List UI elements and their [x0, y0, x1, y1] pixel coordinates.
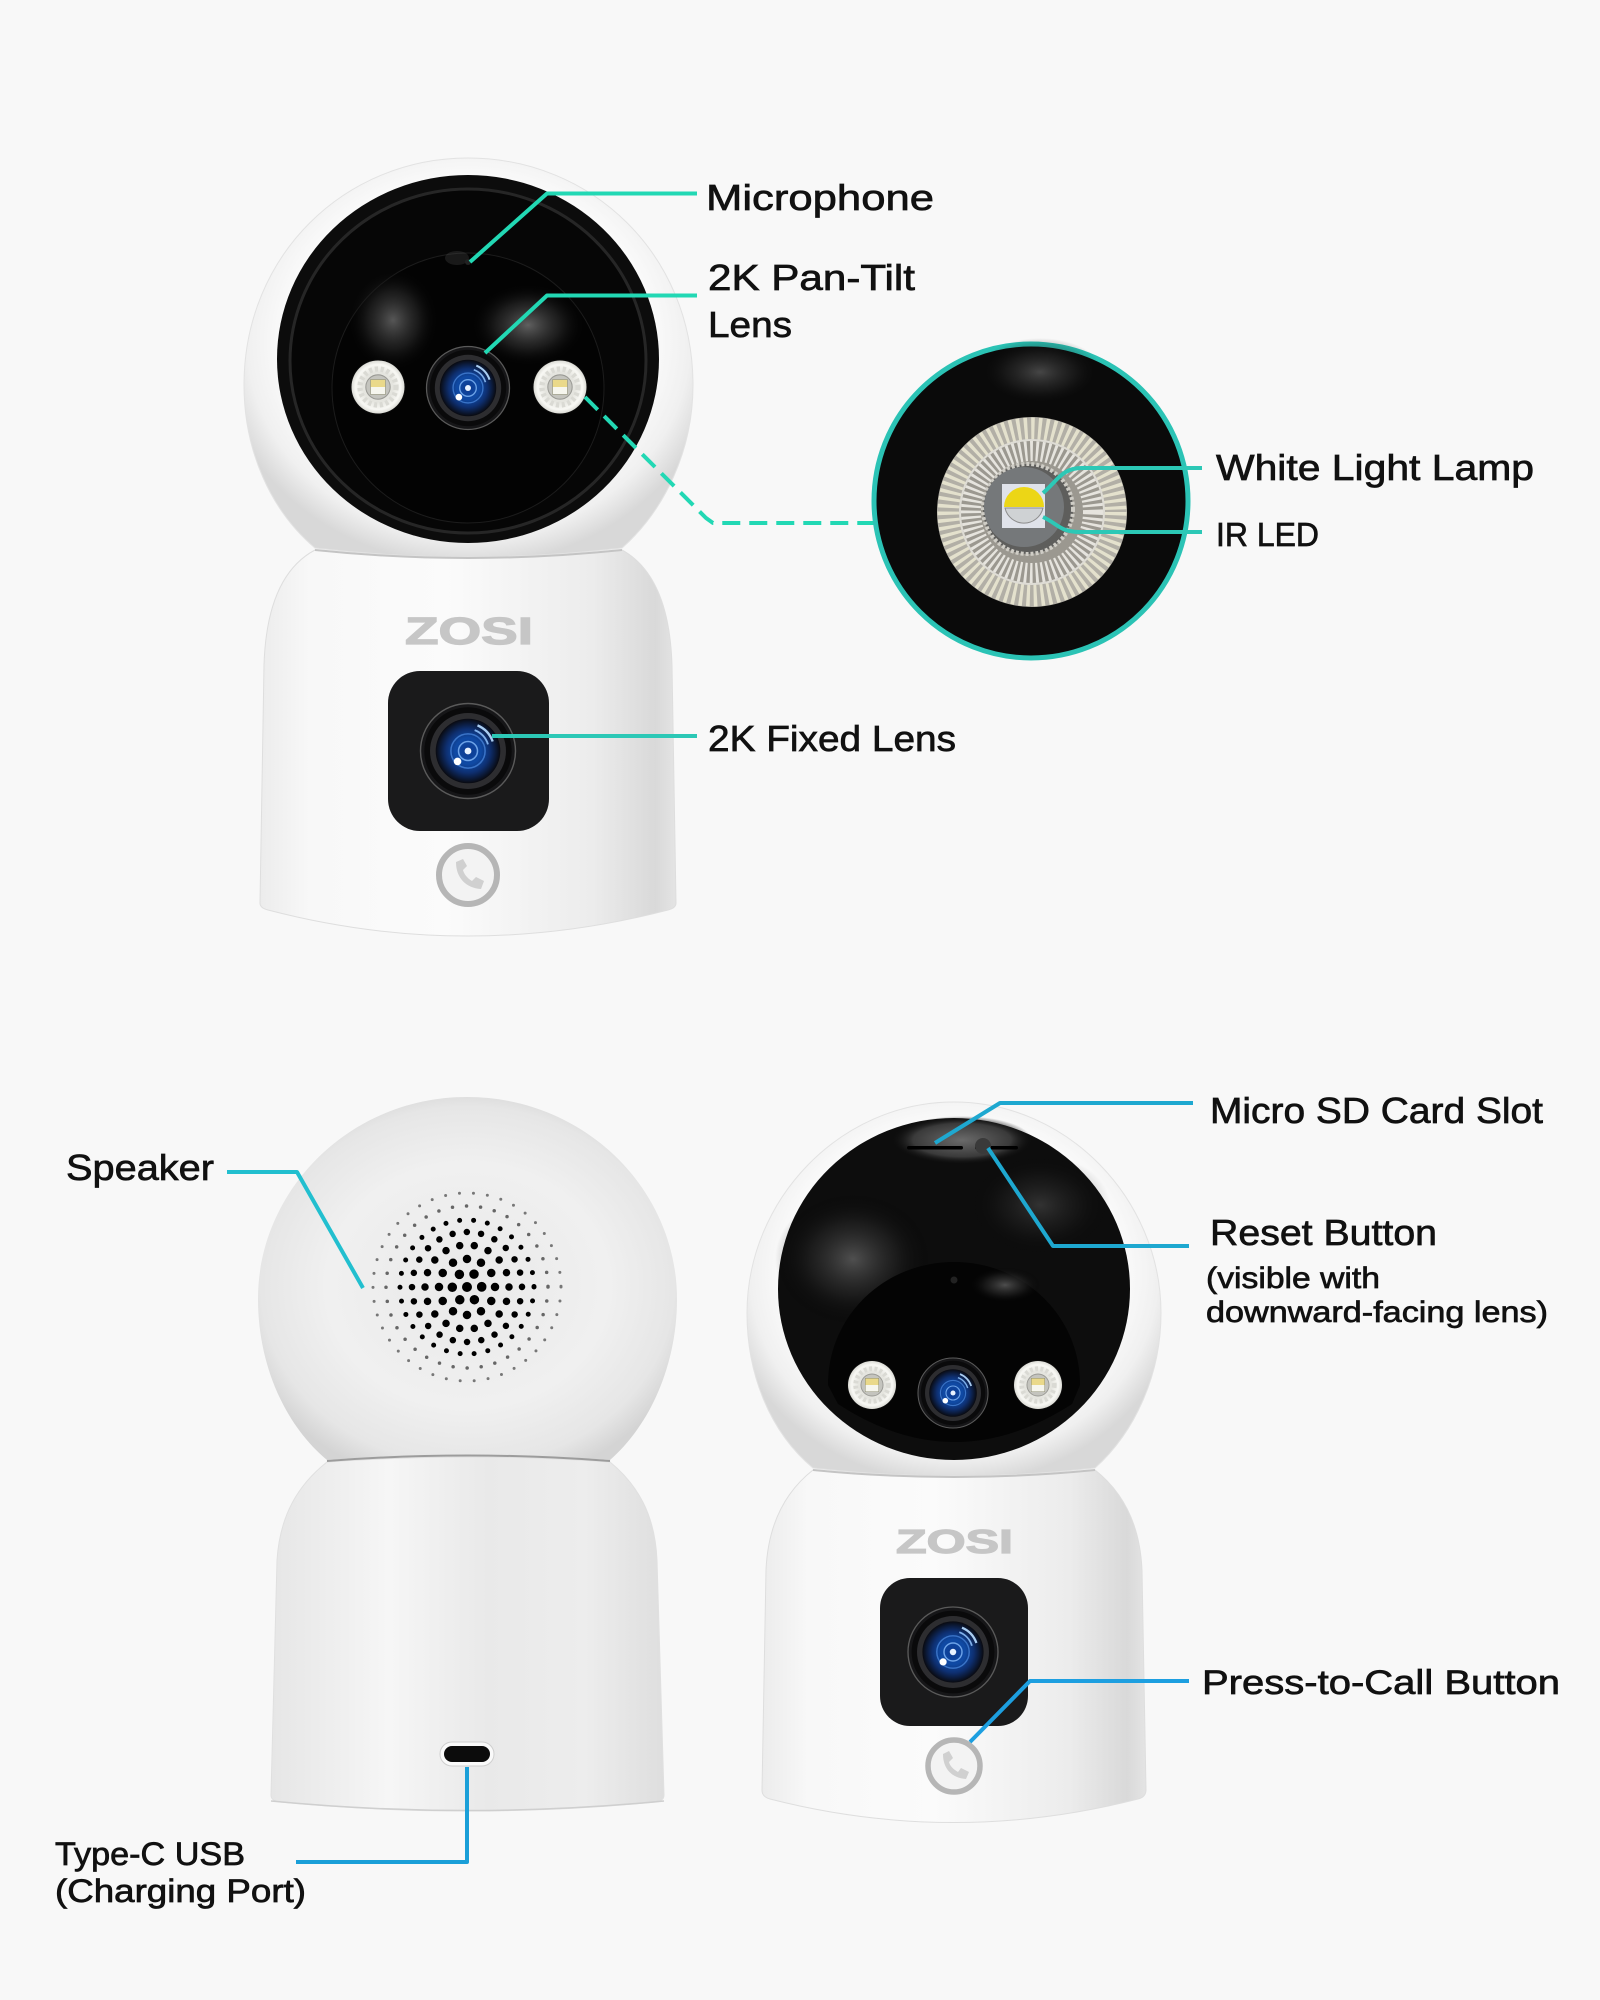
rear neck seam [327, 1456, 610, 1461]
rear camera product view [258, 1097, 677, 1811]
label: 2K Pan-Tilt Lens: Lens [708, 304, 792, 345]
microphone hole [465, 259, 471, 265]
leader line: white light lamp [1043, 468, 1202, 493]
reset slot [975, 1146, 1018, 1150]
LED chip [1002, 484, 1045, 528]
ZOSI logo: ZOSI [896, 1523, 1013, 1560]
label: 2K Fixed Lens: 2K Fixed Lens [708, 718, 956, 759]
fixed lens [420, 704, 516, 798]
reflector center [984, 467, 1064, 547]
label: Press-to-Call Button: Press-to-Call Button [1202, 1664, 1560, 1702]
fixed lens housing [880, 1578, 1028, 1726]
dome highlight right [470, 283, 586, 367]
leader line: reset button [988, 1148, 1189, 1246]
micro SD slot [907, 1146, 963, 1150]
camera base [762, 1470, 1146, 1822]
rear base bottom edge [271, 1801, 664, 1810]
leader line: fixed lens [492, 734, 697, 738]
rear head [258, 1097, 677, 1460]
speaker grille [373, 1193, 561, 1381]
lens dome [332, 253, 604, 523]
downward-facing camera product view [747, 1102, 1161, 1822]
neck seam [813, 1470, 1095, 1477]
Type-C port [440, 1742, 494, 1766]
reflector teeth [983, 464, 1073, 554]
neck seam [315, 550, 622, 558]
label: reset note: (visible with [1206, 1262, 1380, 1295]
microphone hole [950, 1276, 958, 1284]
yellow phosphor [1004, 487, 1044, 507]
white light right [1013, 1360, 1063, 1410]
label: Speaker: Speaker [66, 1147, 214, 1188]
white light left [847, 1360, 897, 1410]
top sheen [978, 338, 1102, 406]
fixed lens [908, 1607, 998, 1697]
reflector [937, 417, 1127, 607]
fixed lens housing [388, 671, 549, 831]
LED detail circle [874, 338, 1188, 658]
leader line: speaker [227, 1172, 363, 1288]
label: 2K Pan-Tilt Lens: 2K Pan-Tilt [708, 257, 915, 298]
dome highlight left [347, 268, 439, 372]
pan-tilt lens [426, 346, 510, 430]
pan-tilt lens [918, 1358, 988, 1428]
label: Reset Button: Reset Button [1210, 1212, 1437, 1253]
dome highlight [969, 1267, 1041, 1303]
rear base [271, 1457, 664, 1811]
IR dome [1005, 508, 1043, 523]
white light right [532, 359, 588, 415]
reflector outer ribs [951, 431, 1113, 593]
label: Micro SD Card Slot: Micro SD Card Slot [1210, 1090, 1543, 1131]
label: reset note [1206, 1262, 1548, 1329]
label: Type-C USB charging port: Type-C USB [55, 1836, 245, 1872]
leader line: IR LED [1043, 517, 1202, 532]
call button [928, 1740, 980, 1792]
leader line: pan-tilt lens [485, 296, 697, 353]
reflector middle ribs [971, 451, 1093, 573]
label: Type-C USB charging port: (Charging Port) [55, 1873, 306, 1909]
label: Microphone: Microphone [706, 177, 934, 218]
leader line: press-to-call [970, 1681, 1189, 1742]
label: IR LED: IR LED [1216, 516, 1319, 553]
camera base [260, 550, 676, 936]
top control panel [892, 1116, 1032, 1164]
label: 2K Pan-Tilt Lens [708, 257, 915, 345]
ZOSI logo: ZOSI [405, 611, 533, 653]
reset button [975, 1138, 991, 1154]
front camera product view [244, 158, 693, 936]
white light left [350, 359, 406, 415]
camera head [244, 158, 693, 557]
leader line: microphone [470, 194, 697, 262]
detail disc [874, 344, 1188, 658]
camera head [747, 1102, 1161, 1476]
dashed leader line to detail view [585, 397, 875, 523]
label: White Light Lamp: White Light Lamp [1216, 447, 1534, 488]
leader line: Type-C USB [296, 1767, 467, 1862]
reflector rings [960, 440, 1104, 584]
label: reset note: downward-facing lens) [1206, 1296, 1548, 1329]
label: Type-C USB charging port [55, 1836, 306, 1909]
lens dome [828, 1262, 1080, 1442]
leader line: micro SD [935, 1103, 1193, 1143]
disc highlight right [970, 1155, 1110, 1255]
disc highlight [775, 1193, 931, 1325]
black lens disc [277, 175, 659, 543]
disc inner ring [290, 189, 646, 533]
microphone bump [445, 251, 469, 265]
black lens disc [778, 1118, 1130, 1460]
call button [439, 846, 497, 904]
